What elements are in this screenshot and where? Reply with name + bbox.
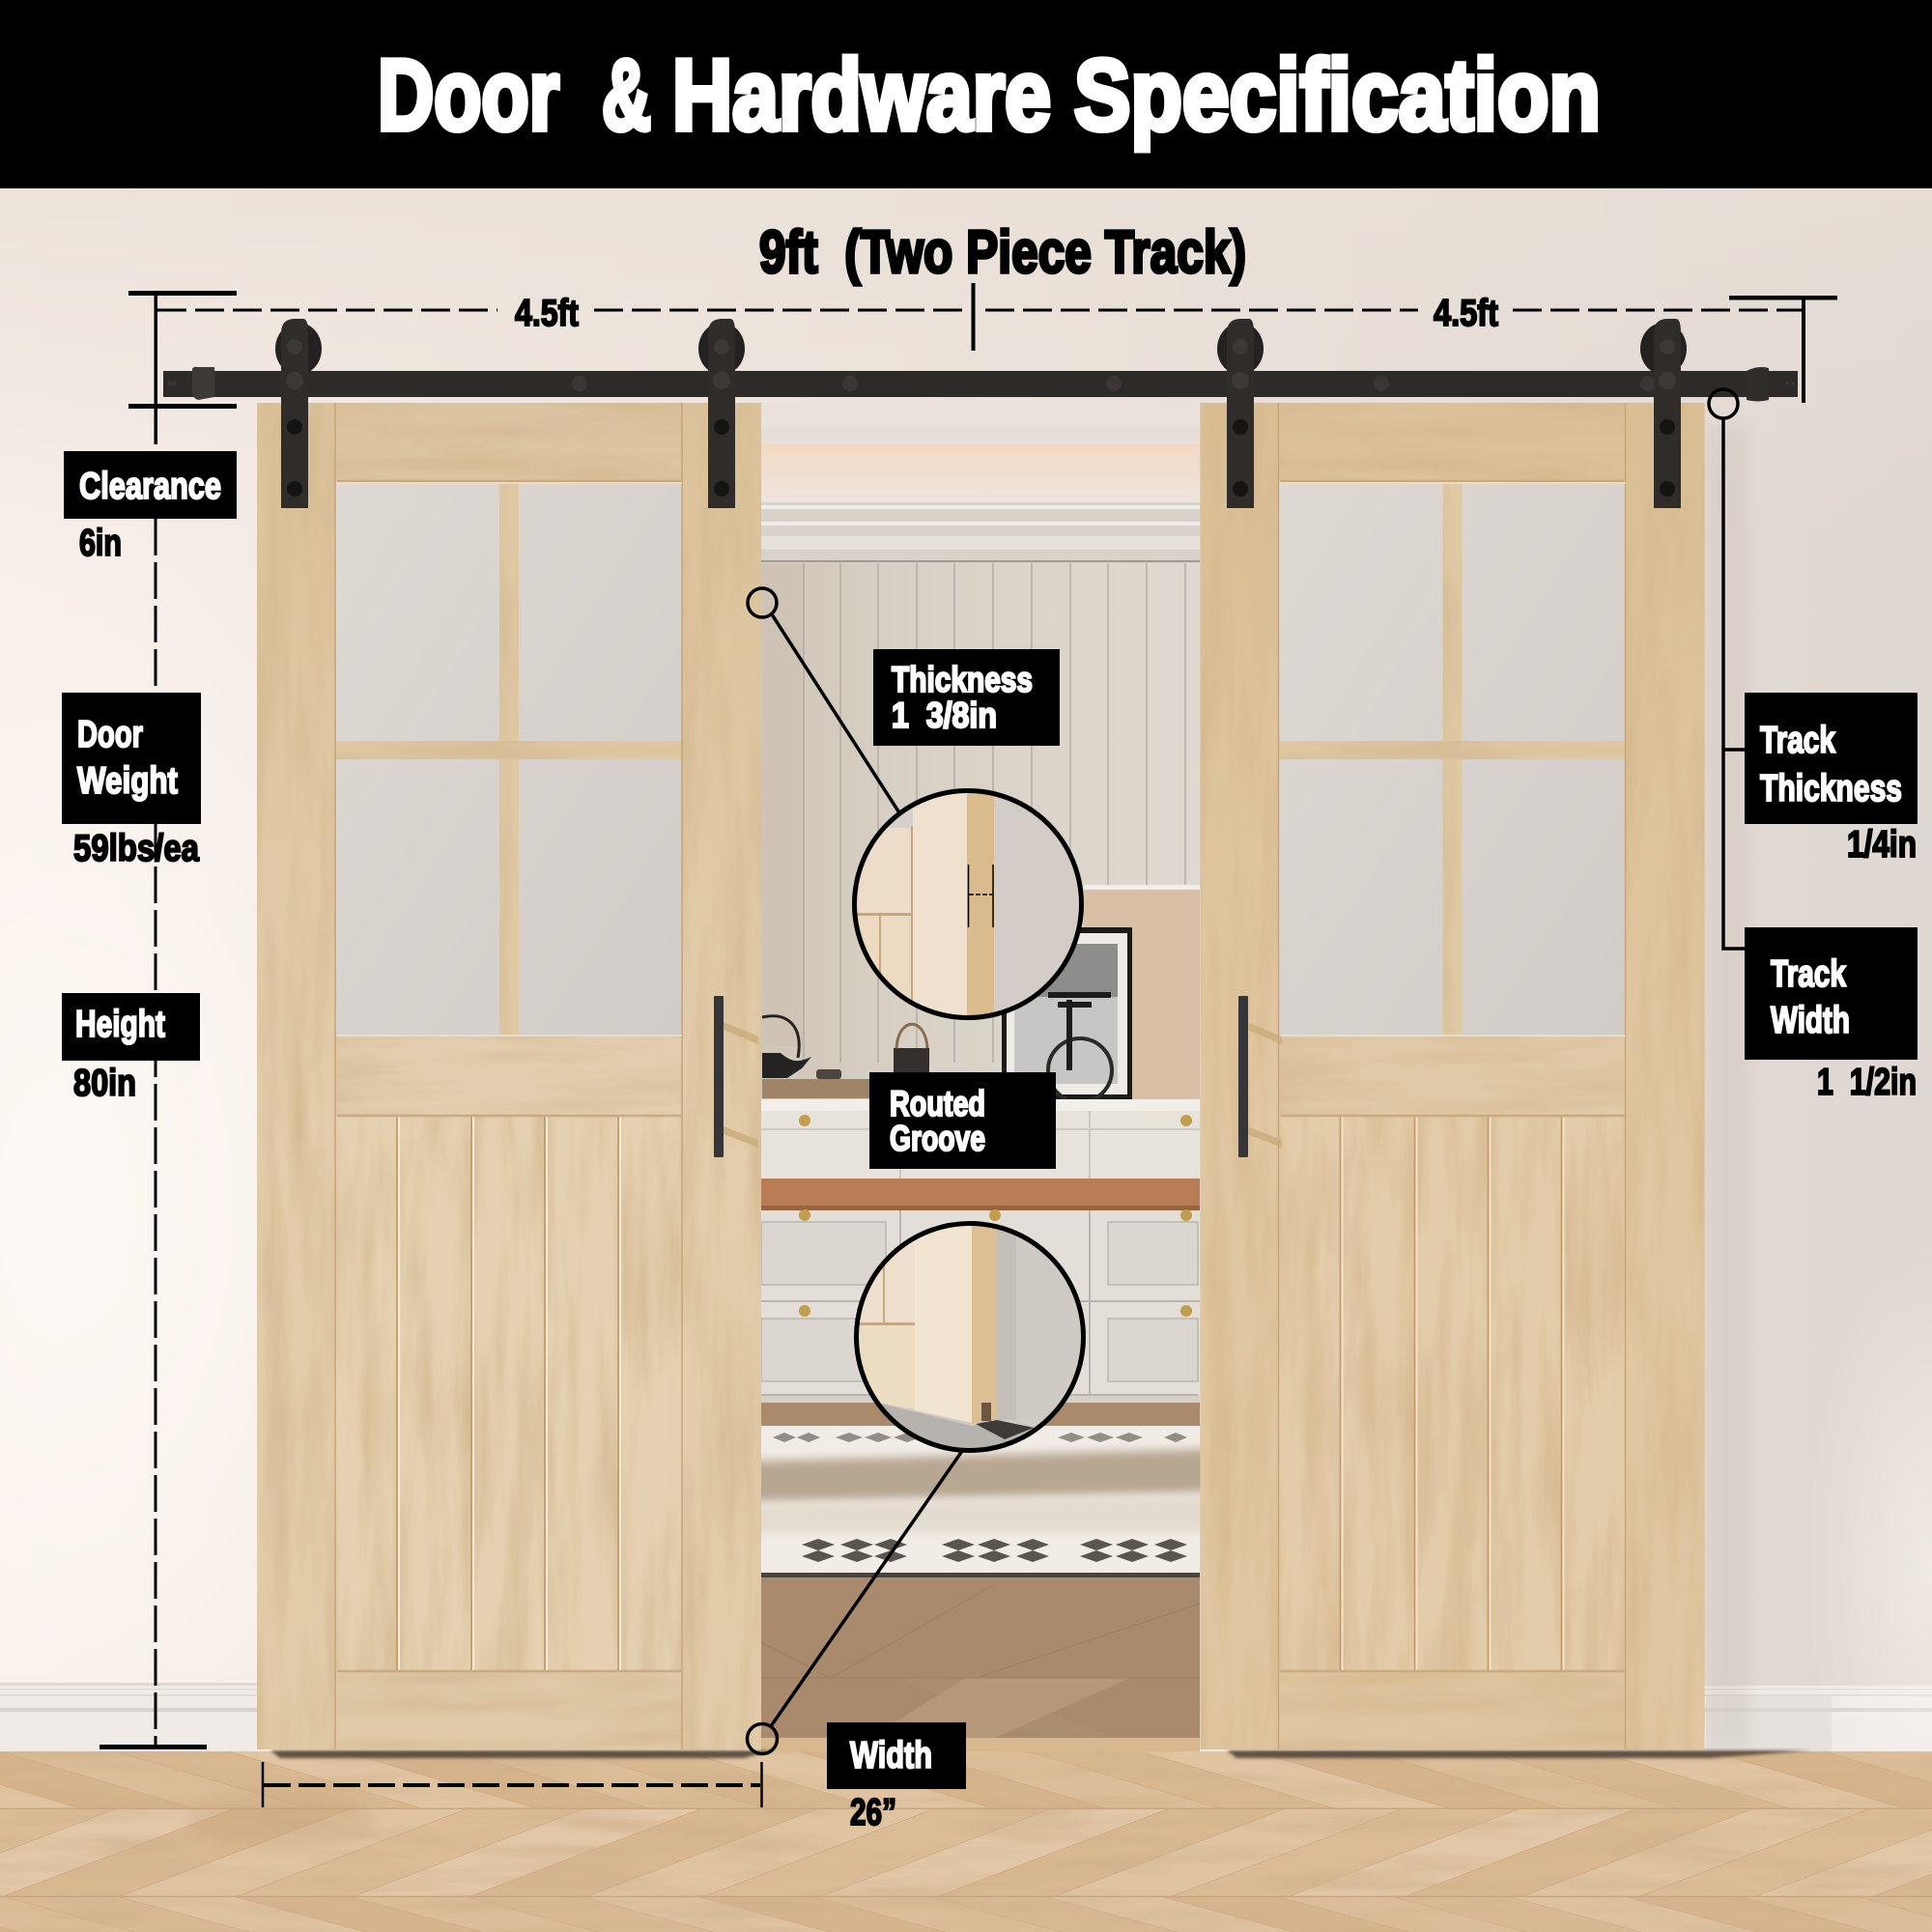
door weight label: Weight <box>77 760 178 802</box>
track-end bracket, right <box>1729 296 1837 403</box>
width value: 26” <box>850 1792 896 1833</box>
interior wood floor <box>761 1577 1200 1751</box>
title: Specification <box>1074 40 1601 152</box>
door weight label <box>62 693 201 869</box>
track width label: Track <box>1771 953 1846 995</box>
thickness callout leader <box>748 588 900 814</box>
weight value: 59lbs/ea <box>73 828 199 869</box>
interior room seen through the doorway <box>744 402 1217 1751</box>
track rail <box>163 367 1798 402</box>
hanger 1 <box>281 319 308 508</box>
hanger wheels <box>275 323 1687 375</box>
magnifier: routed groove detail <box>850 1222 1085 1459</box>
height dimension line <box>99 519 207 1749</box>
title <box>378 40 1601 152</box>
clearance label <box>64 451 237 564</box>
title: Hardware <box>672 40 1051 152</box>
baseboard <box>0 1683 1932 1751</box>
thickness label: Thickness <box>892 660 1033 699</box>
track dimension line <box>157 283 1804 351</box>
title: & <box>602 40 651 152</box>
thickness tick marks <box>968 865 993 927</box>
clearance label: Clearance <box>79 466 221 507</box>
left door handle <box>714 996 758 1157</box>
height label: Height <box>75 1004 165 1045</box>
thickness label <box>873 649 1060 746</box>
dimension label: 4.5ft <box>1434 293 1498 334</box>
dimension label: 4.5ft <box>515 293 579 334</box>
framed bicycle picture <box>1002 927 1132 1102</box>
width callout leader <box>748 1451 962 1754</box>
hanger 2 <box>708 319 735 508</box>
teapots <box>762 1016 929 1079</box>
bottom rail <box>335 1671 682 1749</box>
routed groove label: Groove <box>890 1119 985 1158</box>
wood counter <box>761 1179 1200 1210</box>
title: Door <box>378 40 559 152</box>
height label <box>62 993 200 1104</box>
glass panes <box>335 481 682 1037</box>
track mounting bolts <box>168 376 1795 391</box>
lock rail <box>335 1037 682 1116</box>
clearance value: 6in <box>79 523 122 564</box>
paneled wall <box>761 563 1200 1104</box>
muntins <box>499 481 519 1037</box>
track length heading: 9ft (Two Piece Track) <box>759 219 1246 286</box>
track width label: Width <box>1771 1000 1850 1041</box>
width label: Width <box>850 1735 932 1776</box>
track thickness label: Track <box>1760 720 1835 761</box>
lower cabinets <box>761 1209 1200 1403</box>
track thickness value: 1/4in <box>1847 824 1917 866</box>
magnifier: door thickness detail <box>850 782 1083 1024</box>
clearance bracket, left <box>128 291 237 444</box>
track thickness label <box>1745 693 1918 866</box>
door cast shadows <box>270 425 1811 1758</box>
hanger 4 <box>1654 319 1681 508</box>
routed groove label <box>869 1072 1056 1169</box>
back floor <box>761 1403 1200 1426</box>
rug <box>744 1426 1217 1577</box>
track stops <box>192 367 214 400</box>
thickness label: 1 3/8in <box>892 696 997 735</box>
light patch on right wall <box>1806 1236 1932 1893</box>
white countertop and cabinets <box>761 1099 1200 1179</box>
width label <box>827 1722 966 1833</box>
door weight label: Door <box>77 714 143 755</box>
track callout leader <box>1709 389 1745 949</box>
height value: 80in <box>73 1063 136 1104</box>
hanger 3 <box>1227 319 1254 508</box>
routed groove label: Routed <box>890 1084 985 1123</box>
vertical plank panels <box>335 1116 682 1671</box>
top rail <box>335 403 682 481</box>
right door handle <box>1238 996 1282 1157</box>
floor: herringbone planks <box>0 1751 1932 1932</box>
door stiles <box>257 403 335 1749</box>
title banner <box>0 0 1932 188</box>
wooden tray <box>762 1079 870 1098</box>
backsplash <box>1084 890 1200 1102</box>
right door <box>1200 403 1705 1749</box>
track width label <box>1745 927 1918 1103</box>
width dimension line <box>263 1762 761 1807</box>
left door <box>257 403 761 1749</box>
